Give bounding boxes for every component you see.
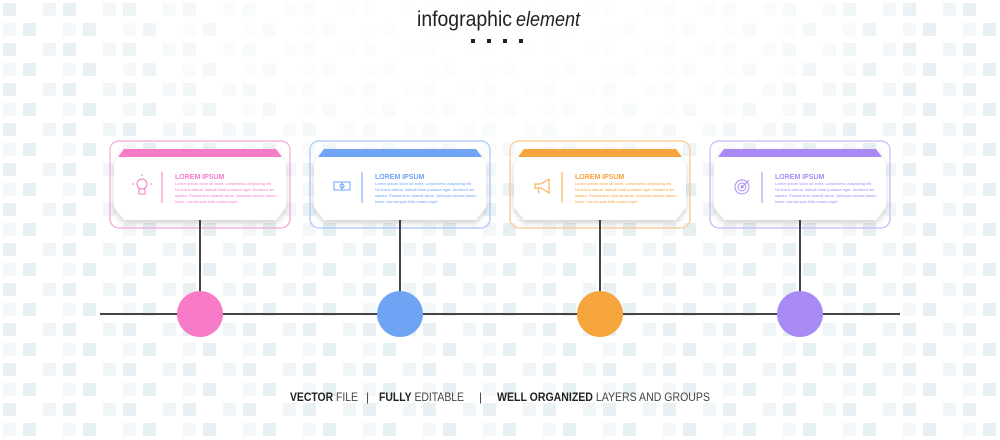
footer text: | [366, 390, 369, 404]
footer text [290, 390, 710, 404]
step 1: pink card: tortor, nec tempus felis ornare eget. [175, 199, 238, 204]
step 1: pink card: Lorem ipsum dolor sit amet, consectetur adipiscing elit. [175, 181, 272, 186]
step 2: blue card: Lorem ipsum dolor sit amet, consectetur adipiscing elit. [375, 181, 472, 186]
timeline axis [100, 313, 900, 315]
icon: megaphone [535, 179, 549, 193]
step 3: orange card: LOREM IPSUM [575, 174, 625, 181]
step 4: purple card: Ut luctus metus, blandit vitae posuere eget, tincidunt vel [775, 187, 874, 192]
step 3: orange card: sapien. Praesent eu blandit lacus. Quisque ultrices ipsum [575, 193, 677, 198]
step 4: purple card [710, 141, 890, 337]
step 2: blue card: LOREM IPSUM [375, 174, 425, 181]
title [417, 8, 581, 43]
footer text: WELL ORGANIZED LAYERS AND GROUPS [497, 390, 710, 404]
step 2: blue card: Ut luctus metus, blandit vitae posuere eget, tincidunt vel [375, 187, 474, 192]
step 1: pink card [110, 141, 290, 337]
step 1: pink card: LOREM IPSUM [175, 174, 225, 181]
step 2: blue card: tortor, nec tempus felis ornare eget. [375, 199, 438, 204]
step 1: pink card: sapien. Praesent eu blandit lacus. Quisque ultrices ipsum [175, 193, 277, 198]
step 4: purple card: LOREM IPSUM [775, 174, 825, 181]
step 2: blue card [310, 141, 490, 337]
step 4: purple card: tortor, nec tempus felis ornare eget. [775, 199, 838, 204]
footer text: FULLY EDITABLE [379, 390, 464, 404]
icon: target [735, 180, 749, 194]
step 3: orange card: Lorem ipsum dolor sit amet, consectetur adipiscing elit. [575, 181, 672, 186]
footer text: | [479, 390, 482, 404]
step 3: orange card [510, 141, 690, 337]
step 4: purple card: sapien. Praesent eu blandit lacus. Quisque ultrices ipsum [775, 193, 877, 198]
step 2: blue card: sapien. Praesent eu blandit lacus. Quisque ultrices ipsum [375, 193, 477, 198]
title: infographic [417, 8, 512, 31]
title: element [516, 9, 581, 31]
step 3: orange card: tortor, nec tempus felis ornare eget. [575, 199, 638, 204]
icon: light bulb [132, 174, 152, 194]
step 3: orange card: Ut luctus metus, blandit vitae posuere eget, tincidunt vel [575, 187, 674, 192]
icon: puzzle [334, 182, 350, 190]
footer text: VECTOR FILE [290, 390, 358, 404]
step 1: pink card: Ut luctus metus, blandit vitae posuere eget, tincidunt vel [175, 187, 274, 192]
step 4: purple card: Lorem ipsum dolor sit amet, consectetur adipiscing elit. [775, 181, 872, 186]
